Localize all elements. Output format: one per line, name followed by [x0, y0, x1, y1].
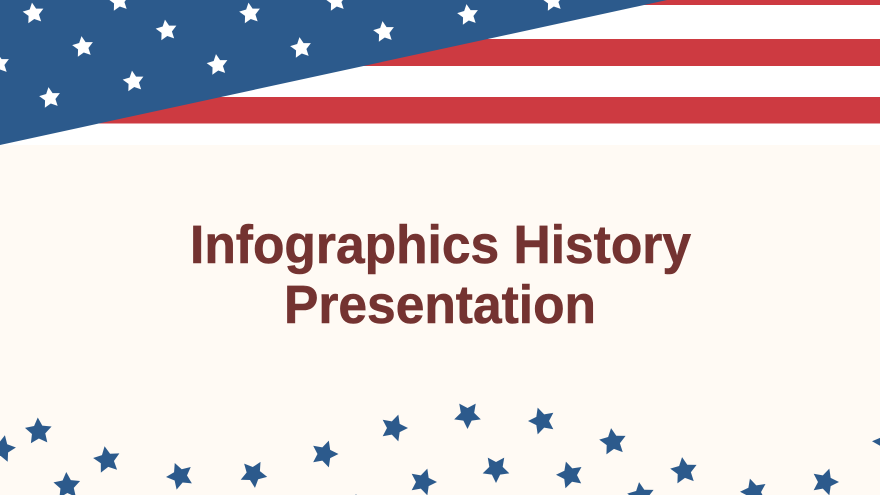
flag banner — [0, 0, 880, 145]
red stripes — [0, 0, 880, 124]
white stars — [0, 0, 565, 108]
blue canton — [0, 0, 667, 145]
blue stars — [0, 396, 880, 495]
title line 2: Presentation — [284, 275, 596, 335]
title — [190, 215, 691, 335]
title line 1: Infographics History — [190, 215, 691, 275]
white stripes base — [0, 0, 880, 145]
